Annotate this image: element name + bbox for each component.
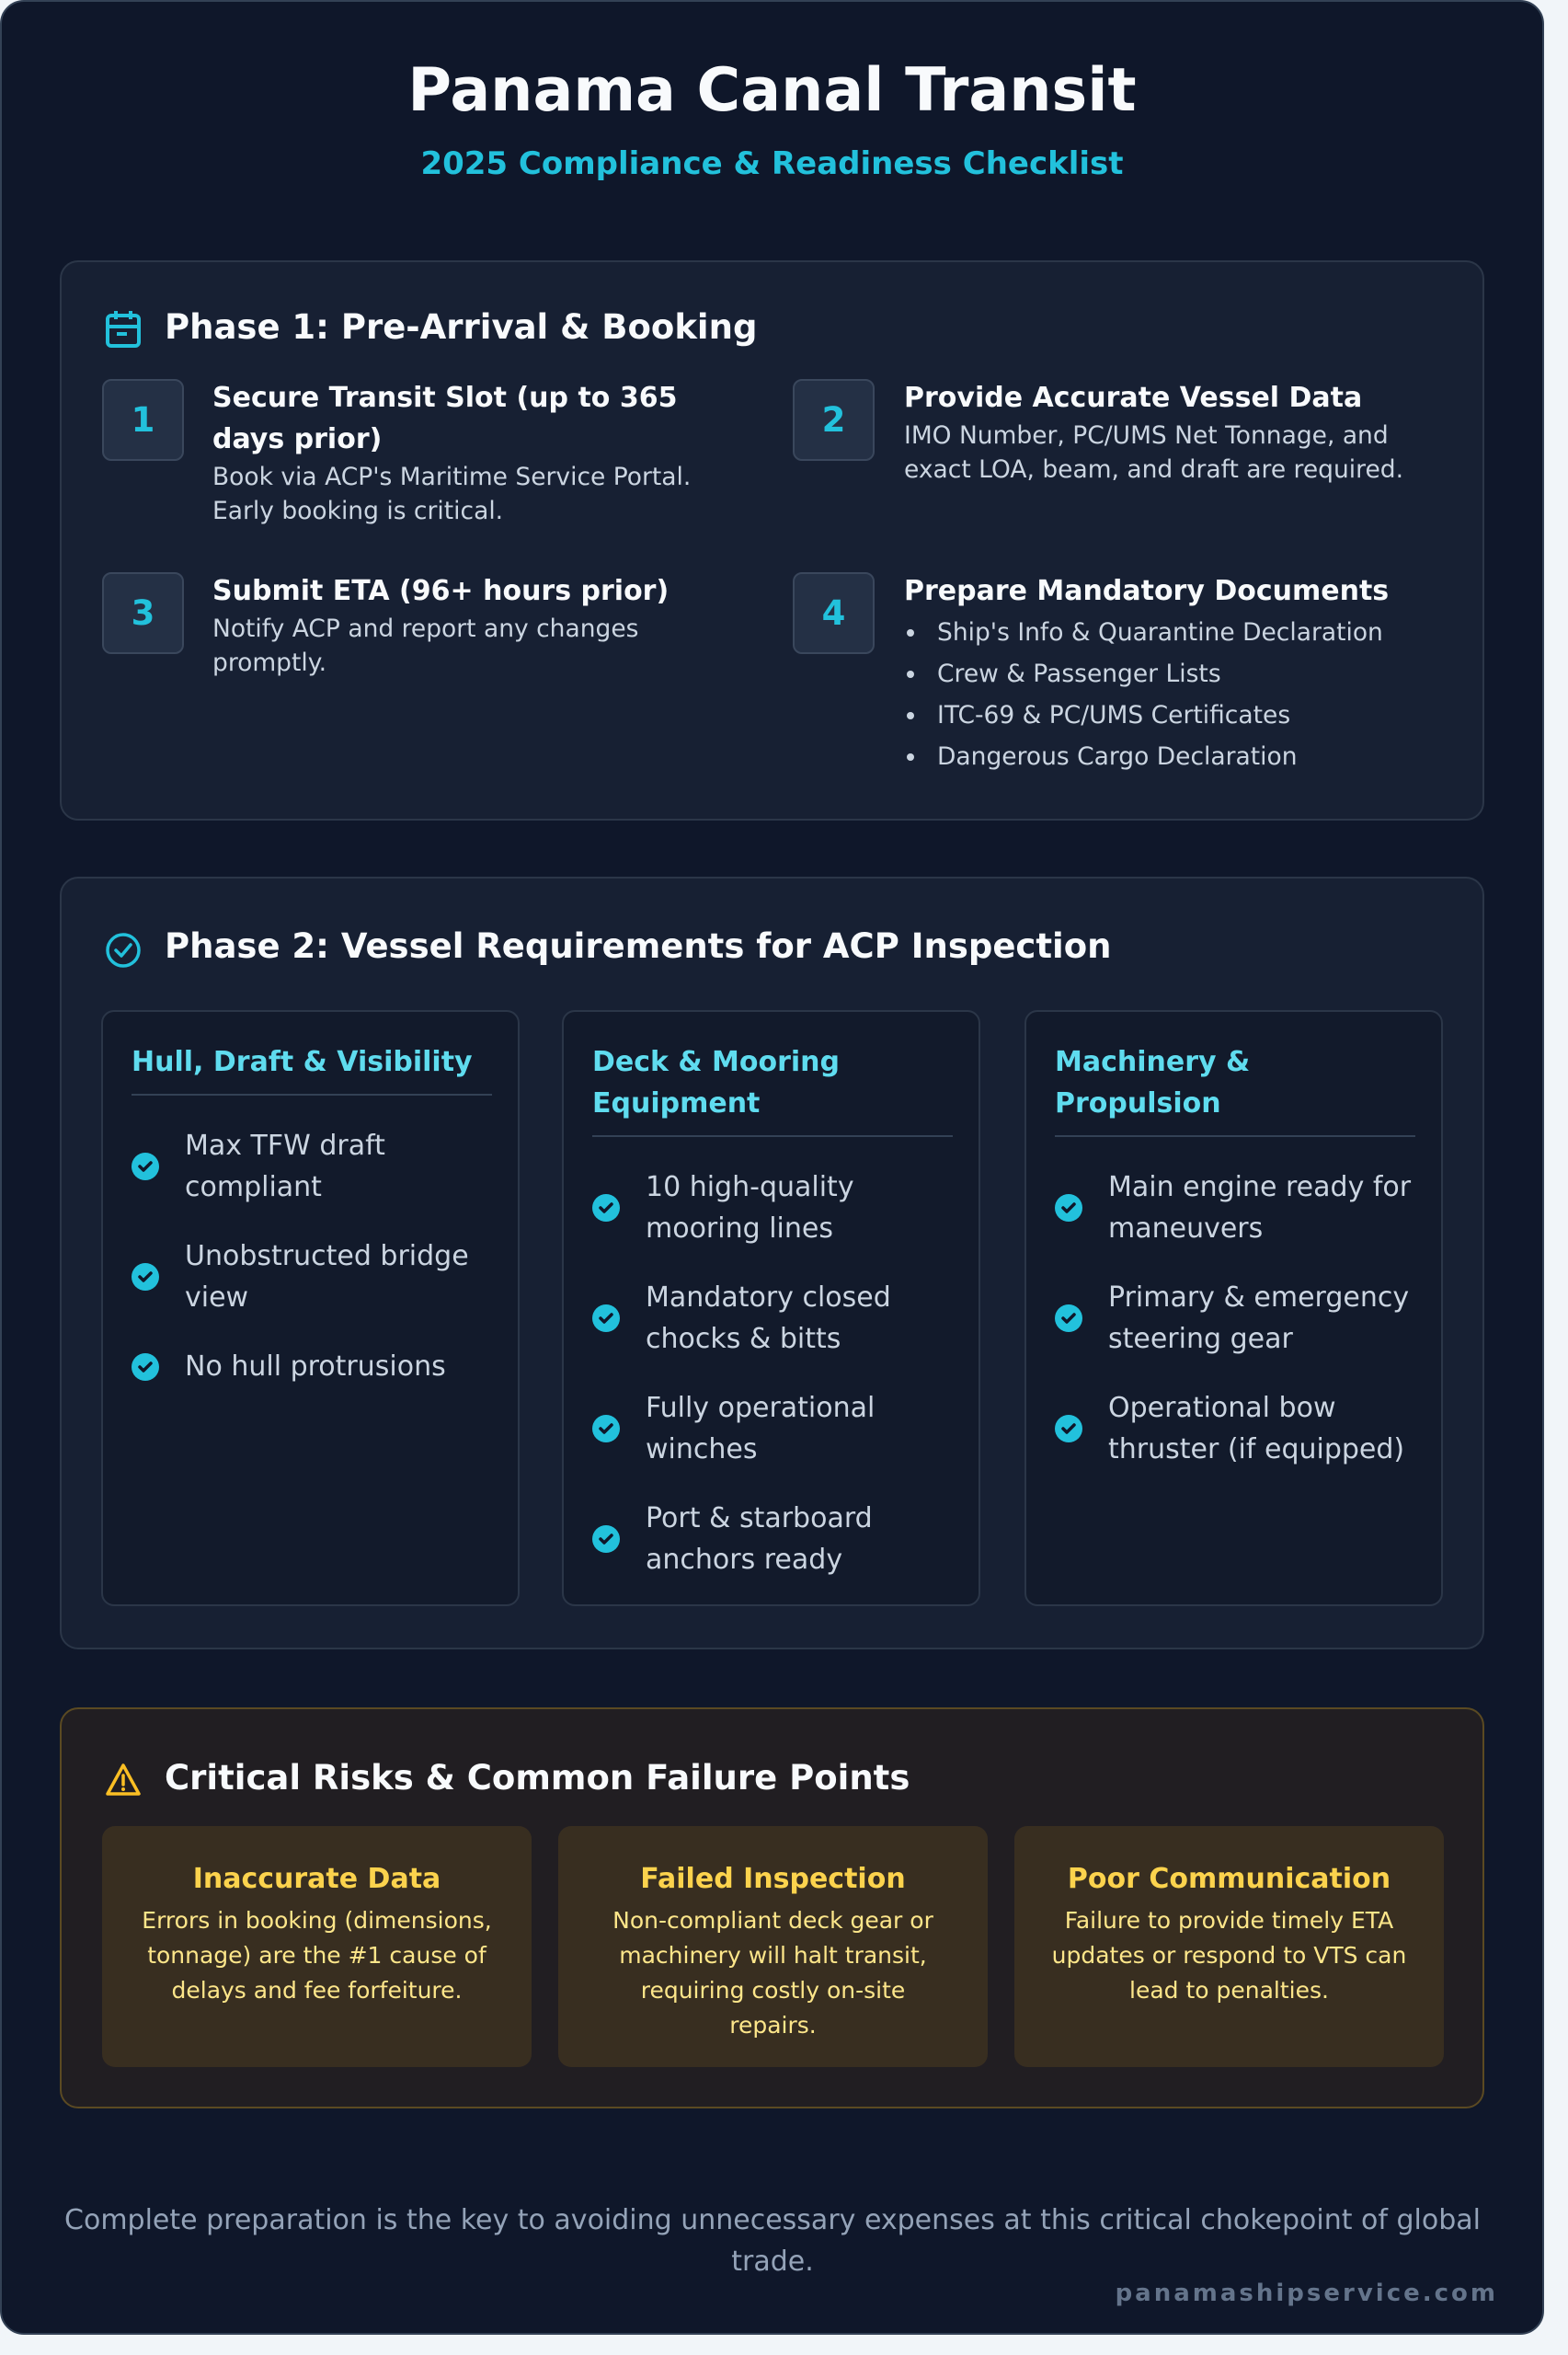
column: hull (101, 1010, 520, 1606)
column title: Deck & Mooring Equipment (592, 1046, 840, 1120)
heading: phase 1: Phase 1: Pre-Arrival & Booking (165, 307, 757, 347)
item: Port & starboard anchors ready (646, 1502, 873, 1576)
risk card: failed inspection: Non-compliant deck gear or machinery will halt transit, requiring costly on-site repairs. (612, 1907, 933, 2039)
risk card: inaccurate data (102, 1826, 532, 2067)
step 4 text: Prepare Mandatory Documents (904, 575, 1389, 607)
column title: Machinery & Propulsion (1055, 1046, 1250, 1120)
item: 10 high-quality mooring lines (646, 1171, 854, 1245)
panel: phase 2 (60, 877, 1484, 1649)
column: machinery (1024, 1010, 1443, 1606)
item: Max TFW draft compliant (185, 1130, 385, 1203)
step 3 text: Notify ACP and report any changes promptly. (212, 615, 638, 677)
step 2 text: IMO Number, PC/UMS Net Tonnage, and exact LOA, beam, and draft are required. (904, 421, 1403, 484)
subtitle: 2025 Compliance & Readiness Checklist (420, 145, 1124, 182)
column title: Hull, Draft & Visibility (132, 1046, 473, 1078)
step 4 text (904, 575, 1389, 771)
risk card: inaccurate data: Inaccurate Data (193, 1863, 441, 1895)
step 3 text: Submit ETA (96+ hours prior) (212, 575, 669, 607)
step 3 number (102, 572, 184, 654)
panel: risks (60, 1707, 1484, 2108)
heading: phase 2: Phase 2: Vessel Requirements for ACP Inspection (165, 926, 1111, 966)
step 1 text: Secure Transit Slot (up to 365 days prior) (212, 382, 677, 455)
column: deck (562, 1010, 980, 1606)
step 4 text: Dangerous Cargo Declaration (937, 742, 1298, 771)
step 4 text: Crew & Passenger Lists (937, 660, 1221, 688)
risk card: poor communication: Failure to provide timely ETA updates or respond to VTS can lead to penalties. (1052, 1907, 1406, 2004)
step 3 text (212, 575, 669, 677)
title: Panama Canal Transit (407, 56, 1137, 125)
step 2 number (793, 379, 875, 461)
risk card: poor communication (1014, 1826, 1444, 2067)
step 1 text: Book via ACP's Maritime Service Portal. Early booking is critical. (212, 463, 691, 525)
footer text: Complete preparation is the key to avoiding unnecessary expenses at this critical chokepoint of global trade. (64, 2204, 1481, 2278)
risk card: poor communication: Poor Communication (1068, 1863, 1391, 1895)
item: No hull protrusions (185, 1350, 446, 1383)
icon: warning (106, 1763, 141, 1796)
item: Main engine ready for maneuvers (1108, 1171, 1411, 1245)
item: Unobstructed bridge view (185, 1240, 469, 1314)
item: Mandatory closed chocks & bitts (646, 1281, 891, 1355)
step 1 text (212, 382, 691, 525)
step 2 text: Provide Accurate Vessel Data (904, 382, 1362, 414)
risk card: inaccurate data: Errors in booking (dimensions, tonnage) are the #1 cause of delays and fee forfeiture. (142, 1907, 492, 2004)
step 4 text: ITC-69 & PC/UMS Certificates (937, 701, 1290, 729)
step 4 number (793, 572, 875, 654)
item: Primary & emergency steering gear (1108, 1281, 1409, 1355)
panel: phase 1 (60, 260, 1484, 821)
heading: risks: Critical Risks & Common Failure Points (165, 1758, 910, 1798)
step 2 number: 2 (822, 400, 845, 440)
step 4 text: Ship's Info & Quarantine Declaration (937, 618, 1383, 647)
step 1 number: 1 (132, 400, 155, 440)
icon: check circle (106, 933, 141, 968)
step 4 number: 4 (822, 593, 845, 633)
watermark: panamashipservice.com (1116, 2280, 1498, 2307)
item: Operational bow thruster (if equipped) (1108, 1392, 1404, 1465)
risk card: failed inspection (558, 1826, 988, 2067)
step 3 number: 3 (132, 593, 155, 633)
step 1 number (102, 379, 184, 461)
step 2 text (904, 382, 1403, 484)
risk card: failed inspection: Failed Inspection (640, 1863, 906, 1895)
item: Fully operational winches (646, 1392, 875, 1465)
icon: calendar (106, 311, 141, 348)
